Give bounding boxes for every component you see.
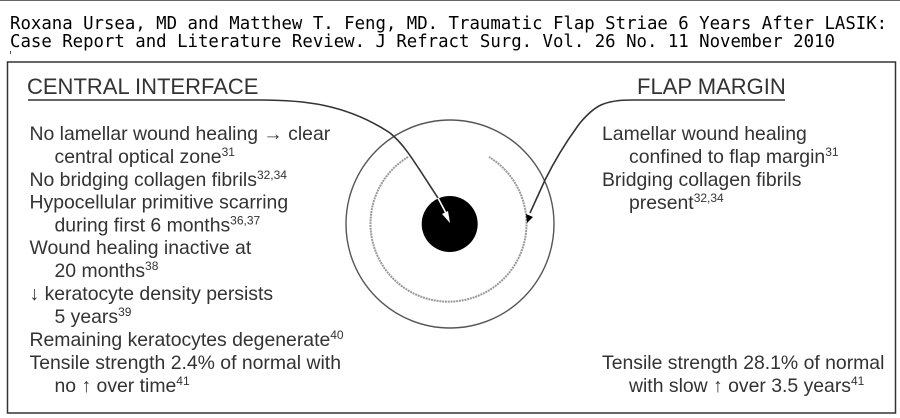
outer cornea circle [346,120,554,328]
citation header [10,14,887,52]
panel: central interface list: 20 months [54,260,145,282]
panel: central interface list: 41 [176,374,190,388]
citation header: Roxana Ursea, MD and Matthew T. Feng, MD. Traumatic Flap Striae 6 Years After LASIK: [10,14,887,34]
panel: central interface list: 31 [222,145,235,159]
panel: central interface list: 39 [118,305,132,319]
heading: flap margin: FLAP MARGIN [637,74,786,99]
panel: central interface list: No lamellar wound healing → clear [30,123,331,145]
panel: central interface list: Hypocellular primitive scarring [30,192,288,214]
panel: central interface list: during first 6 months [54,214,230,236]
panel: flap margin list [602,123,884,397]
panel: central interface list [30,123,344,397]
panel: flap margin list: present [629,192,694,214]
panel: central interface list: 36,37 [230,214,261,228]
panel: central interface list: 32,34 [257,168,287,182]
panel: flap margin list: confined to flap margin [629,146,825,168]
panel: flap margin list: Lamellar wound healing [602,123,807,145]
panel: central interface list: central optical zone [54,146,222,168]
panel: central interface list: Tensile strength 2.4% of normal with [30,352,341,374]
panel: flap margin list: with slow ↑ over 3.5 years [629,375,851,397]
panel: central interface list: no ↑ over time [54,375,176,397]
panel: central interface list: 38 [145,259,159,273]
panel: central interface list: Wound healing inactive at [30,237,252,259]
panel: flap margin list: 41 [851,374,865,388]
panel: central interface list: Remaining keratocytes degenerate [30,329,330,351]
panel: central interface list: No bridging collagen fibrils [30,169,257,191]
arrow: flap margin to dashed arc [526,100,785,223]
panel: central interface list: 40 [330,328,344,342]
flap margin dashed arc [371,157,526,302]
heading: central interface: CENTRAL INTERFACE [27,74,258,99]
diagram: cornea circles [346,120,554,328]
panel: flap margin list: 32,34 [694,191,724,205]
citation header: Case Report and Literature Review. J Refract Surg. Vol. 26 No. 11 November 2010 [10,32,835,52]
panel: central interface list: ↓ keratocyte density persists [30,283,273,305]
panel: flap margin list: Bridging collagen fibrils [602,169,801,191]
central black zone [422,196,478,252]
panel: central interface list: 5 years [54,306,118,328]
panel: flap margin list: 31 [825,145,839,159]
arrow: central interface to center [28,100,450,223]
panel: flap margin list: Tensile strength 28.1% of normal [602,352,884,374]
